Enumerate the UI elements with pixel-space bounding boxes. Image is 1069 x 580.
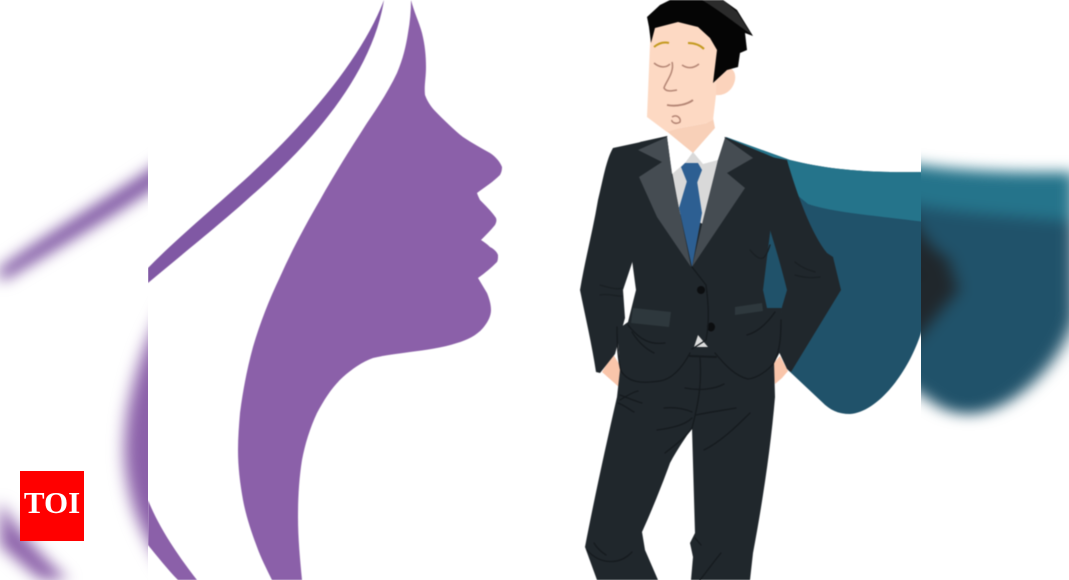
TOI logo xyxy=(20,471,84,541)
woman face profile xyxy=(238,0,502,580)
logo red square xyxy=(20,471,84,541)
woman silhouette xyxy=(148,0,502,580)
right lapel xyxy=(692,138,753,267)
right sleeve xyxy=(760,155,841,372)
eyebrows xyxy=(654,42,704,49)
tie xyxy=(679,163,702,267)
clothing creases xyxy=(586,244,782,580)
shirt at waist xyxy=(694,335,708,347)
cape light band xyxy=(726,137,925,222)
ear xyxy=(716,68,736,96)
jacket buttons xyxy=(697,286,715,332)
left collar xyxy=(667,131,693,174)
trousers xyxy=(585,345,775,580)
neck xyxy=(665,118,715,153)
hair highlight xyxy=(702,0,751,34)
face xyxy=(647,20,718,132)
left hand xyxy=(602,355,620,386)
left sleeve xyxy=(579,142,641,374)
lower hair stripe xyxy=(148,500,197,580)
cape dark body xyxy=(726,137,925,414)
right hand xyxy=(772,356,788,384)
hair xyxy=(647,0,753,83)
jacket pockets xyxy=(631,303,763,327)
jacket body xyxy=(617,136,782,383)
head xyxy=(647,0,753,153)
right collar xyxy=(693,136,726,164)
shirt xyxy=(672,152,718,224)
upper hair stripe xyxy=(148,0,384,283)
central artwork xyxy=(148,0,925,580)
businessman with cape xyxy=(580,0,925,580)
left lapel xyxy=(638,137,691,267)
logo text: TOI xyxy=(24,485,80,520)
eyes, nose and mouth xyxy=(654,62,699,123)
central image panel background xyxy=(148,0,921,580)
cape xyxy=(726,137,925,414)
